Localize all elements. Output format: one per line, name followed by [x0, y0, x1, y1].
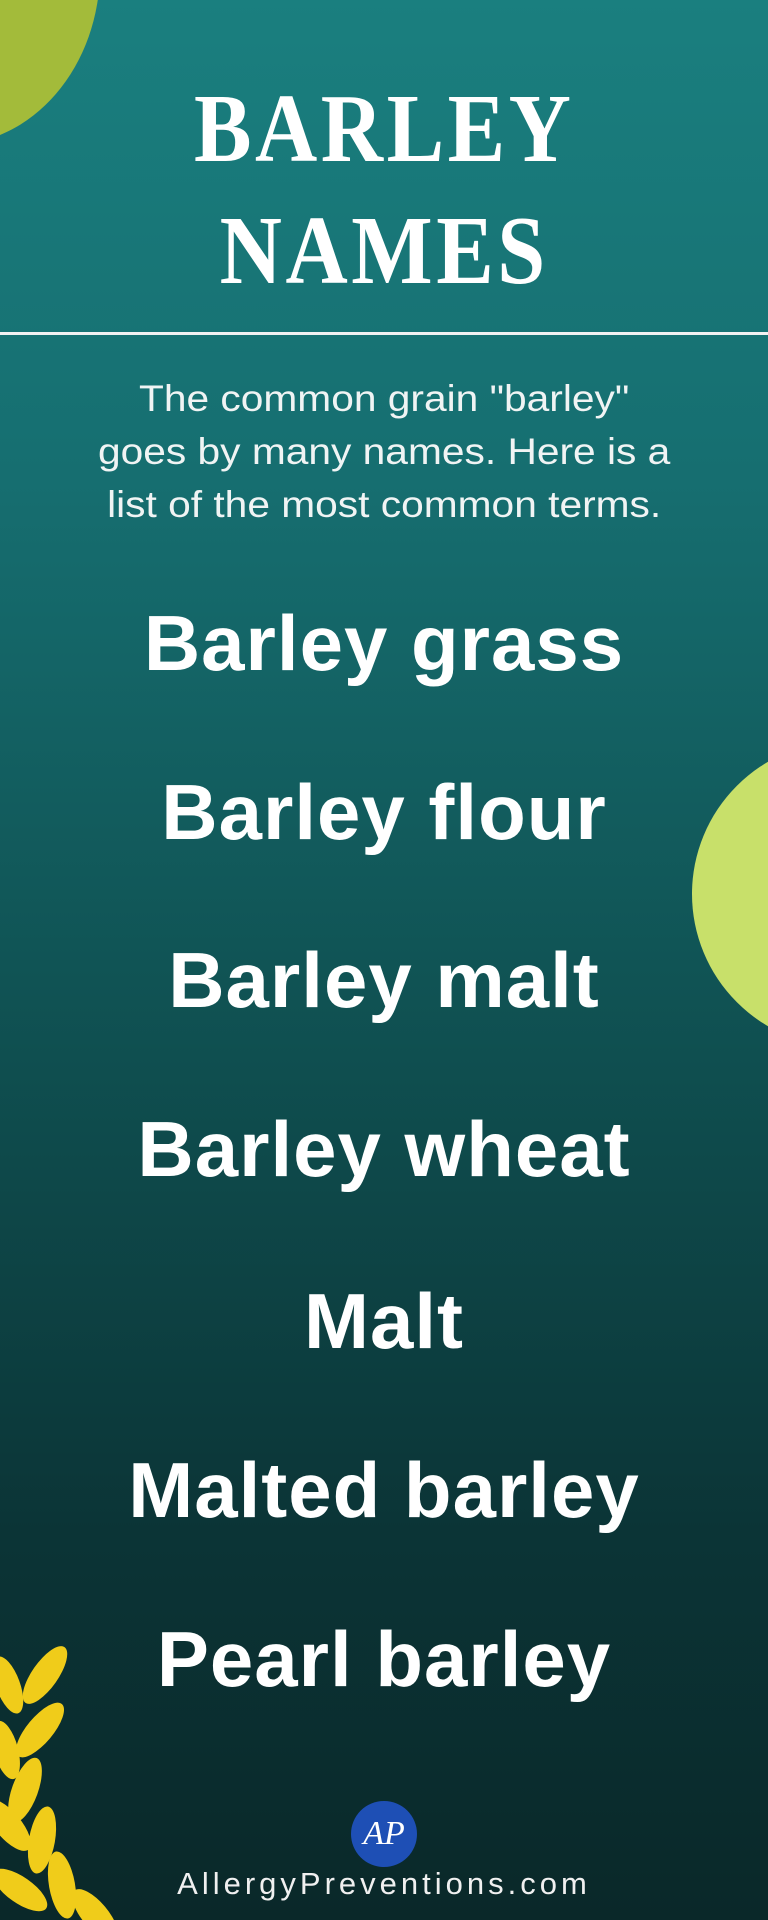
- website footer: AllergyPreventions.com: [177, 1866, 591, 1901]
- intro text: [98, 378, 670, 525]
- title: [194, 75, 574, 305]
- icon: wheat leaves: [0, 1646, 114, 1920]
- intro text: list of the most common terms.: [107, 484, 661, 525]
- name: Barley grass: Barley grass: [144, 599, 624, 687]
- title: BARLEY: [194, 75, 574, 183]
- logo: AP: [363, 1815, 405, 1852]
- decorative circle top-left: [0, 0, 100, 145]
- name: Barley flour: Barley flour: [161, 768, 607, 856]
- title: NAMES: [219, 197, 549, 305]
- intro text: goes by many names. Here is a: [98, 431, 670, 472]
- divider: [0, 332, 768, 335]
- name: Barley malt: Barley malt: [168, 936, 600, 1024]
- decorative circle right: [692, 741, 768, 1047]
- name: Pearl barley: Pearl barley: [157, 1615, 611, 1703]
- name: Malt: Malt: [304, 1277, 464, 1365]
- name: Barley wheat: Barley wheat: [137, 1105, 631, 1193]
- intro text: The common grain "barley": [139, 378, 629, 419]
- name: Malted barley: Malted barley: [128, 1446, 640, 1534]
- logo: [351, 1801, 417, 1867]
